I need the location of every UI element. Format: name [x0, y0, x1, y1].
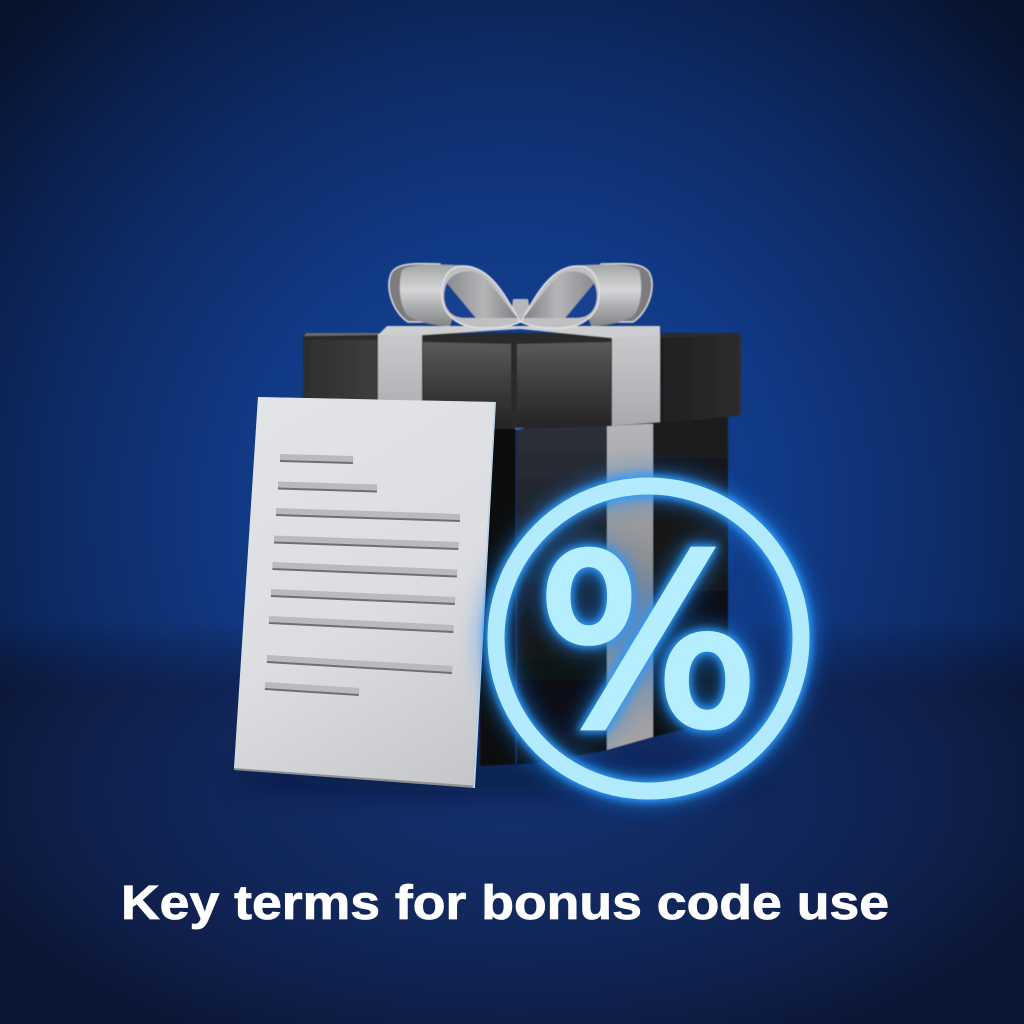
badge ring: [496, 486, 801, 791]
right bow loop: [521, 264, 652, 328]
box vertical ribbon: [607, 424, 653, 750]
floor shadow: [230, 764, 770, 792]
lid ribbon right: [612, 333, 660, 426]
left bow loop: [389, 264, 520, 328]
badge near glow: %: [536, 507, 760, 780]
title: Key terms for bonus code use: [121, 877, 889, 930]
badge wide glow: [496, 486, 801, 791]
bow knot: [510, 299, 532, 322]
lid ribbon left: [378, 334, 422, 414]
lid top edge highlight: [304, 333, 380, 336]
badge wide glow: %: [536, 507, 760, 780]
badge near glow: [496, 486, 801, 791]
gift box: [303, 264, 741, 766]
box body: [480, 416, 728, 766]
percent sign: %: [536, 507, 760, 780]
bow: [389, 264, 652, 328]
ribbon over lid top: [378, 326, 660, 338]
document text lines: [265, 457, 460, 692]
document: [234, 397, 496, 788]
box lid: [303, 326, 741, 430]
glowing percent badge: [496, 486, 801, 791]
